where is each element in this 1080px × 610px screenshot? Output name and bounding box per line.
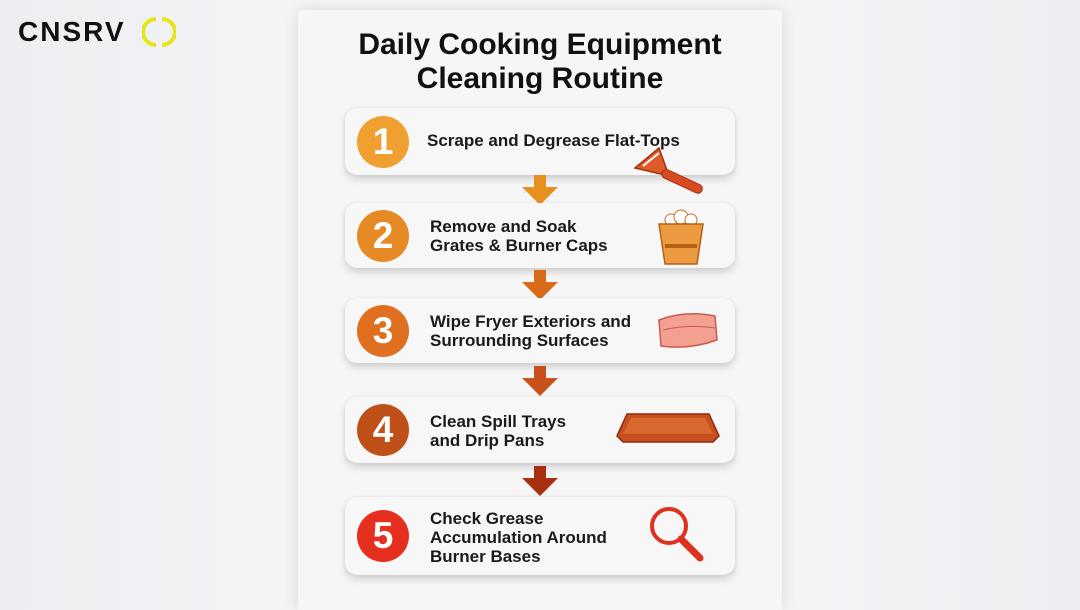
card 5: Accumulation Around <box>430 528 607 547</box>
logo <box>18 16 176 47</box>
title: Cleaning Routine <box>417 62 663 95</box>
icon: towel <box>658 313 718 348</box>
card 4: Clean Spill Trays <box>430 412 566 431</box>
card 4: 4 <box>373 409 393 450</box>
icon: scraper <box>634 146 703 194</box>
card 1: Scrape and Degrease Flat-Tops <box>427 131 680 150</box>
card 2 <box>345 203 735 268</box>
title <box>358 28 722 95</box>
card 5: 5 <box>373 515 393 556</box>
arrow 2 <box>522 270 558 298</box>
card 5: Check Grease <box>430 509 543 528</box>
card 1: 1 <box>373 121 393 162</box>
card 3: Wipe Fryer Exteriors and <box>430 312 631 331</box>
icon: magnifier <box>650 507 704 562</box>
card 4: and Drip Pans <box>430 431 544 450</box>
card 1 <box>345 108 735 175</box>
panel <box>298 10 782 610</box>
arrow 4 <box>522 466 558 496</box>
card 5: Burner Bases <box>430 547 541 566</box>
card 2: 2 <box>373 215 393 256</box>
card 5 <box>345 497 735 575</box>
arrow 1 <box>522 175 558 203</box>
logo: CNSRV <box>18 16 126 47</box>
card 3 <box>345 298 735 363</box>
icon: logo ring <box>142 17 176 47</box>
icon: tray <box>616 413 720 443</box>
card 2: Remove and Soak <box>430 217 576 236</box>
card 2: Grates & Burner Caps <box>430 236 608 255</box>
card 3: 3 <box>373 310 393 351</box>
arrow 3 <box>522 366 558 396</box>
card 4 <box>345 397 735 463</box>
icon: bucket <box>658 210 704 265</box>
title: Daily Cooking Equipment <box>358 28 722 61</box>
card 3: Surrounding Surfaces <box>430 331 609 350</box>
